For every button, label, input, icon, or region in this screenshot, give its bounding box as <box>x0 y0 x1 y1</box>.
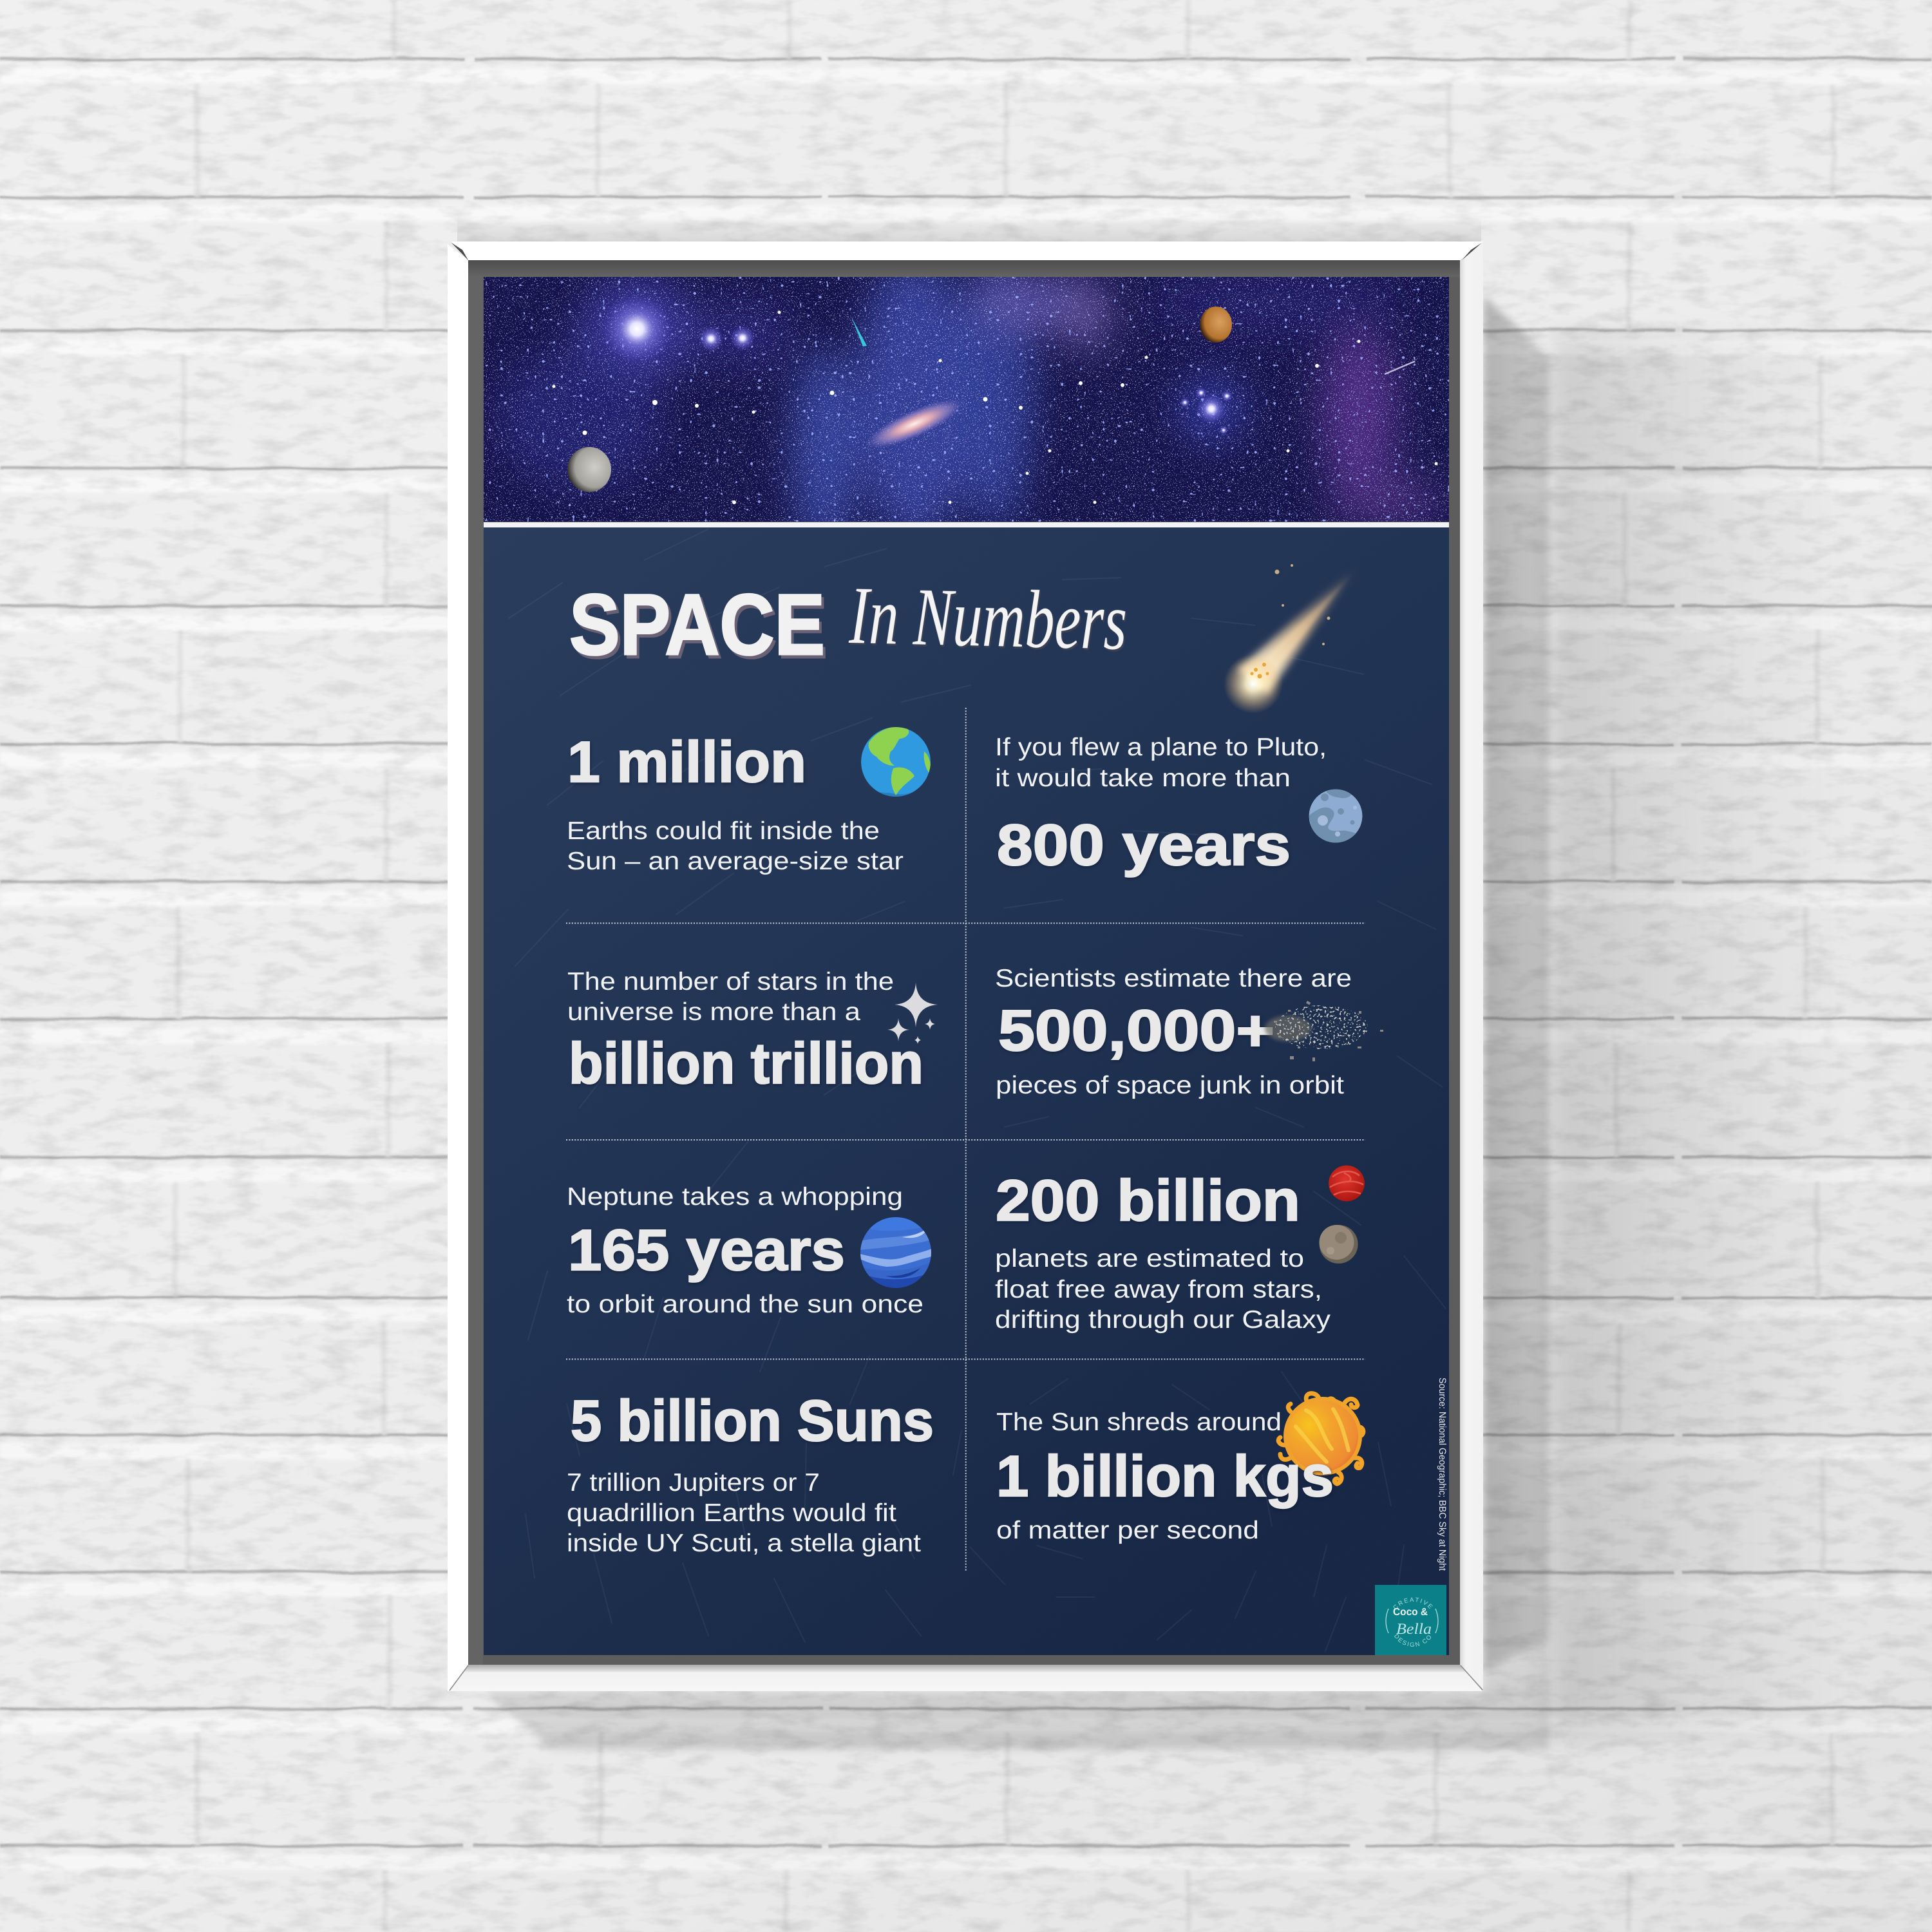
stat: Neptune 165 years <box>567 1183 923 1318</box>
stat: 800 years to Pluto <box>995 734 1327 878</box>
stat: 500,000+ space junk: pieces of space junk in orbit <box>996 1072 1344 1099</box>
stat: 800 years to Pluto: If you flew a plane to Pluto, <box>995 734 1327 761</box>
stat: 5 billion Suns: inside UY Scuti, a stella giant <box>567 1530 921 1557</box>
icon: brown planet <box>1319 1225 1358 1264</box>
title: In Numbers <box>848 569 1128 667</box>
cyan meteor <box>851 317 867 346</box>
icon: sparkle stars <box>887 983 938 1044</box>
planet: moon grey <box>567 447 611 492</box>
title: SPACE <box>569 577 825 673</box>
logo: Coco and Bella: CREATIVE <box>1394 1597 1433 1609</box>
stat: 1 billion kgs: 1 billion kgs <box>996 1444 1334 1509</box>
stat: 5 billion Suns: 5 billion Suns <box>571 1389 934 1454</box>
planet: venus orange <box>1200 307 1232 343</box>
nebula clouds <box>487 277 1449 522</box>
stat: 500,000+ space junk: 500,000+ <box>998 999 1274 1063</box>
icon: pluto <box>1309 788 1363 844</box>
logo: Coco and Bella: DESIGN CO <box>1394 1634 1431 1647</box>
icon: sun with flares <box>1278 1394 1363 1484</box>
stat: billion trillion stars: universe is more than a <box>567 998 860 1026</box>
stat: 200 billion rogue planets: drifting through our Galaxy <box>995 1306 1331 1334</box>
title <box>569 569 1128 673</box>
logo: Coco and Bella <box>1375 1585 1446 1655</box>
poster body background <box>484 527 1449 1655</box>
picture frame <box>448 242 1483 1691</box>
stat: 1 million Earths <box>567 730 904 875</box>
stat: 5 billion Suns: 7 trillion Jupiters or 7 <box>567 1469 820 1497</box>
logo: Coco and Bella: Coco & <box>1393 1607 1428 1618</box>
icon: neptune <box>860 1214 932 1291</box>
galaxy <box>861 390 968 458</box>
stat: billion trillion stars: billion trillion <box>569 1032 923 1096</box>
stat: 5 billion Suns <box>567 1389 934 1557</box>
stat: 5 billion Suns: quadrillion Earths would fit <box>567 1499 896 1527</box>
white star scatter <box>553 310 1437 504</box>
bright star and companions <box>601 293 1233 435</box>
stat: 1 million Earths: Earths could fit inside the <box>567 817 880 845</box>
stat: 500,000+ space junk: Scientists estimate there are <box>995 965 1352 992</box>
stat: 1 million Earths: 1 million <box>567 730 806 795</box>
icon: earth <box>860 726 931 800</box>
stat: Neptune 165 years: to orbit around the sun once <box>567 1291 923 1318</box>
poster header: galaxy starfield panel <box>484 258 1449 554</box>
stat: billion trillion stars <box>567 968 923 1096</box>
stat: 1 million Earths: Sun – an average-size star <box>567 848 904 875</box>
stat: 200 billion rogue planets: planets are estimated to <box>995 1245 1304 1273</box>
icon: comet <box>1224 564 1358 714</box>
stat: 1 billion kgs: of matter per second <box>996 1517 1259 1544</box>
stat: 200 billion rogue planets <box>995 1169 1331 1334</box>
frame shadow cast on the wall <box>457 216 1845 1749</box>
stat: 200 billion rogue planets: float free away from stars, <box>995 1276 1322 1303</box>
grid dividers <box>566 708 1365 1572</box>
logo: Coco and Bella: Bella <box>1396 1621 1432 1638</box>
stat: Neptune 165 years: 165 years <box>568 1218 845 1283</box>
stat: 200 billion rogue planets: 200 billion <box>996 1169 1300 1233</box>
source credit: Source: National Geographic; BBC Sky at Night <box>1437 1378 1448 1571</box>
header divider strip <box>484 522 1449 527</box>
icon: red planet <box>1329 1166 1365 1202</box>
stat: 500,000+ space junk <box>995 965 1352 1099</box>
stat: 1 billion kgs <box>996 1408 1334 1544</box>
icon: space debris cloud <box>1265 1001 1383 1061</box>
stat: Neptune 165 years: Neptune takes a whopping <box>567 1183 903 1211</box>
shooting star <box>1385 361 1415 374</box>
stat: 1 billion kgs: The Sun shreds around <box>996 1408 1282 1436</box>
stat: 800 years to Pluto: 800 years <box>997 813 1291 878</box>
stat: billion trillion stars: The number of stars in the <box>567 968 894 996</box>
stat: 800 years to Pluto: it would take more than <box>995 764 1291 792</box>
